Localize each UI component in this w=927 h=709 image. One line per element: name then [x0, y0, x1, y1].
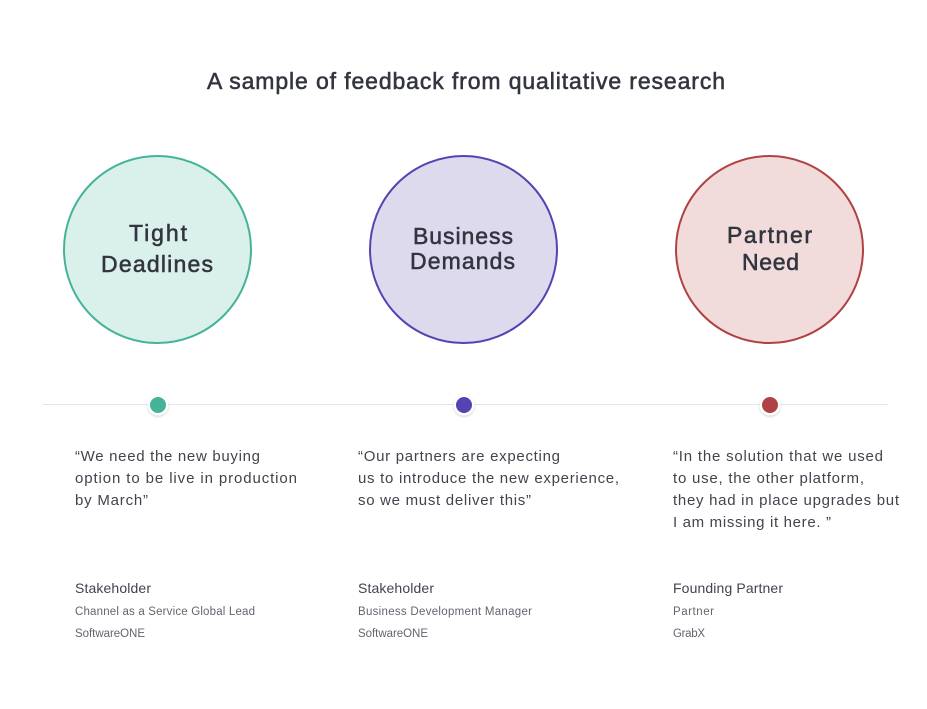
- circle: business demands: Business: [413, 223, 513, 249]
- quote: [75, 448, 297, 509]
- marker: red dot: [760, 394, 780, 416]
- attribution: GrabX: [673, 628, 705, 640]
- attribution: Founding Partner: [673, 580, 783, 596]
- quote: “In the solution that we used: [673, 448, 883, 465]
- quote: so we must deliver this”: [358, 492, 531, 509]
- circle: business demands: [370, 156, 557, 343]
- attribution: [358, 580, 532, 640]
- panel: business demands: [358, 156, 619, 640]
- attribution: [673, 580, 783, 640]
- circle: partner need: [676, 156, 863, 343]
- quote: I am missing it here. ”: [673, 514, 831, 531]
- quote: they had in place upgrades but: [673, 492, 900, 509]
- attribution: Partner: [673, 606, 714, 618]
- attribution: Stakeholder: [358, 580, 434, 596]
- panel: tight deadlines: [64, 156, 297, 640]
- timeline axis: [43, 404, 888, 406]
- title: A sample of feedback from qualitative research: [207, 68, 725, 94]
- attribution: Channel as a Service Global Lead: [75, 606, 255, 618]
- circle: tight deadlines: Tight: [129, 220, 188, 246]
- marker: purple dot: [454, 394, 474, 416]
- marker: green dot: [148, 394, 168, 416]
- quote: “Our partners are expecting: [358, 448, 560, 465]
- circle: partner need: Need: [742, 249, 799, 275]
- attribution: SoftwareONE: [75, 628, 145, 640]
- attribution: Business Development Manager: [358, 606, 532, 618]
- quote: by March”: [75, 492, 148, 509]
- quote: to use, the other platform,: [673, 470, 864, 487]
- quote: [358, 448, 619, 509]
- quote: option to be live in production: [75, 470, 297, 487]
- circle: tight deadlines: [64, 156, 251, 343]
- attribution: [75, 580, 255, 640]
- attribution: Stakeholder: [75, 580, 151, 596]
- panel: partner need: [673, 156, 900, 640]
- quote: “We need the new buying: [75, 448, 260, 465]
- quote: us to introduce the new experience,: [358, 470, 619, 487]
- circle: partner need: Partner: [727, 222, 812, 248]
- circle: tight deadlines: Deadlines: [101, 251, 213, 277]
- quote: [673, 448, 900, 531]
- attribution: SoftwareONE: [358, 628, 428, 640]
- circle: business demands: Demands: [410, 248, 515, 274]
